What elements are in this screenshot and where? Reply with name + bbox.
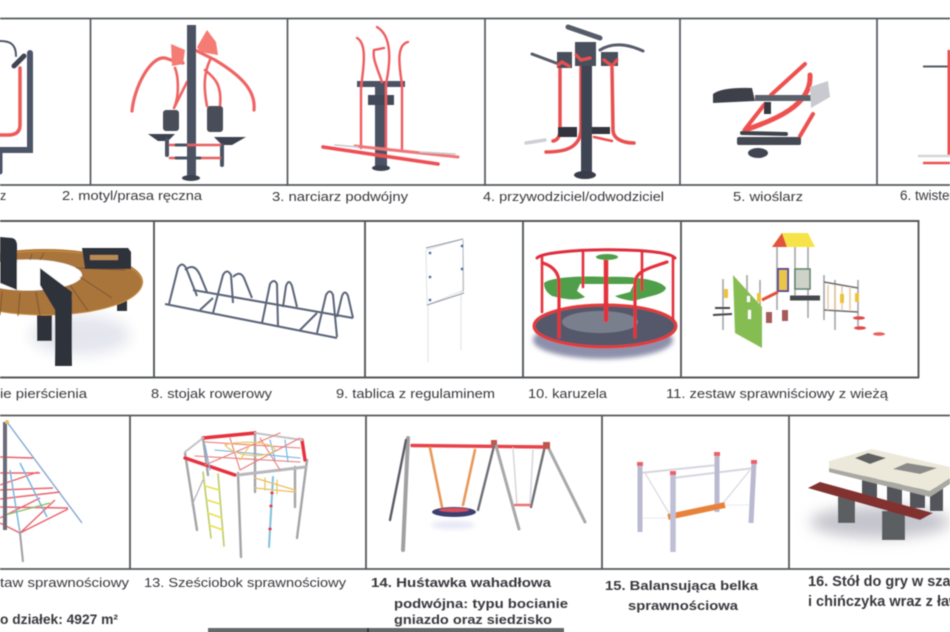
item 7 label: ie pierścienia — [0, 387, 87, 401]
item 5 label: 5. wioślarz — [733, 190, 803, 204]
item 15: balancing beam — [637, 452, 757, 552]
item 15 label: sprawnościowa — [628, 599, 739, 613]
item 14 label — [371, 576, 568, 627]
item 6: twister, cropped — [918, 50, 950, 163]
item 8: bike rack — [165, 264, 353, 338]
item 1 label: z — [0, 189, 6, 203]
item 3 label: 3. narciarz podwójny — [272, 190, 409, 204]
item 1: equipment, cropped — [0, 41, 30, 172]
item 15 label — [605, 579, 759, 613]
parcel area note: o działek: 4927 m² — [0, 612, 118, 627]
item 16 label — [808, 574, 950, 610]
item 11 label: 11. zestaw sprawniściowy z wieżą — [666, 387, 888, 401]
item 11: playset with tower — [713, 233, 885, 348]
item 9: rules board — [426, 239, 464, 362]
item 12: rope pyramid — [0, 420, 82, 562]
item 7: ring bench — [0, 237, 143, 366]
item 13 label: 13. Sześciobok sprawnościowy — [144, 576, 347, 590]
item 2: butterfly and chest press — [132, 25, 254, 181]
item 4: adductor and abductor — [526, 27, 643, 179]
item 8 label: 8. stojak rowerowy — [151, 387, 273, 401]
item 9 label: 9. tablica z regulaminem — [336, 387, 495, 401]
item 13: hexagon climbing frame — [185, 432, 307, 557]
item 14 label: podwójna: typu bocianie — [394, 597, 568, 611]
item 10: carousel — [533, 250, 676, 359]
item 14 label: 14. Huśtawka wahadłowa — [371, 576, 552, 590]
item 3: double skier — [323, 27, 458, 171]
item 14: double pendulum swing — [390, 438, 585, 550]
table top edge — [208, 628, 564, 632]
item 10 label: 10. karuzela — [528, 387, 607, 401]
item 2 label: 2. motyl/prasa ręczna — [62, 189, 202, 203]
item 4 label: 4. przywodziciel/odwodziciel — [483, 190, 664, 204]
item 5: rower — [713, 64, 830, 158]
item 16: game table with benches — [808, 449, 950, 540]
item 15 label: 15. Balansująca belka — [605, 579, 759, 593]
item 14 label: gniazdo oraz siedzisko — [394, 613, 552, 627]
item 12 label: taw sprawnościowy — [0, 576, 130, 590]
